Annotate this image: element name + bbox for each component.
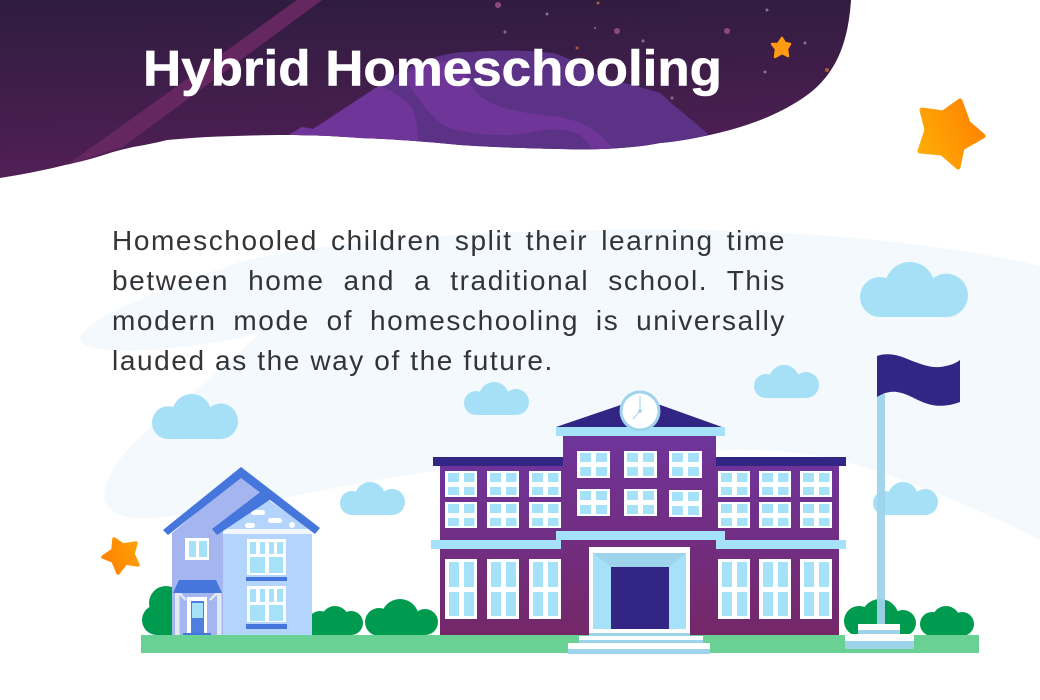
icon: small star in banner — [772, 38, 790, 57]
icon: orange star by house — [103, 539, 138, 573]
top cornice — [556, 427, 725, 436]
entrance — [589, 547, 690, 635]
gable trim — [223, 529, 312, 534]
title: Hybrid Homeschooling — [143, 40, 722, 96]
house — [163, 467, 320, 635]
small window — [185, 538, 209, 560]
intro paragraph: between home and a traditional school. This — [112, 265, 786, 296]
intro paragraph: modern mode of homeschooling is universally — [112, 305, 786, 336]
flagpole — [845, 354, 960, 649]
school steps — [568, 633, 710, 654]
ground — [141, 635, 979, 653]
wing roof — [433, 457, 846, 466]
upper wing windows — [445, 471, 832, 528]
icon: large star — [920, 101, 983, 167]
porch — [173, 580, 222, 635]
right wall — [223, 533, 312, 635]
school — [431, 390, 846, 635]
background pale blob — [80, 229, 1040, 540]
intro paragraph: lauded as the way of the future. — [112, 345, 554, 376]
clock — [620, 390, 660, 432]
intro paragraph: Homeschooled children split their learning time — [112, 225, 786, 256]
bushes — [142, 586, 974, 637]
header banner — [0, 0, 851, 178]
building body — [440, 466, 839, 635]
centre windows — [577, 451, 702, 517]
gable — [223, 497, 312, 530]
middle cornices — [431, 531, 846, 549]
upper window — [246, 539, 287, 581]
clouds — [152, 262, 968, 515]
lower windows — [445, 559, 832, 619]
left wall — [172, 476, 262, 635]
roof — [163, 467, 320, 535]
pediment — [556, 398, 722, 427]
lower window — [246, 586, 287, 629]
flag — [877, 354, 960, 406]
intro paragraph — [112, 225, 786, 376]
flag base — [845, 624, 914, 649]
